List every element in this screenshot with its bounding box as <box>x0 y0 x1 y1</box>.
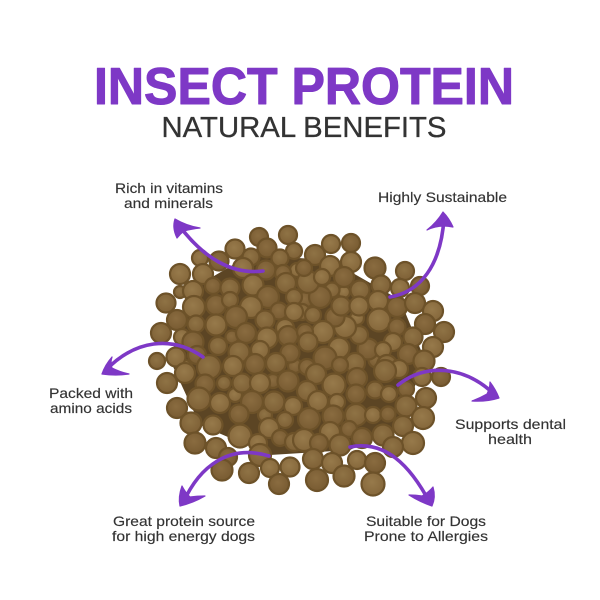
label: dental health: Supports dental <box>455 416 566 432</box>
shadow backing behind kibble pile <box>170 255 425 455</box>
label: vitamins and minerals: and minerals <box>124 195 213 211</box>
arrow: to highly sustainable <box>390 212 453 297</box>
arrow: to vitamins and minerals <box>174 219 263 272</box>
label: allergies: Prone to Allergies <box>364 528 488 544</box>
arrow: to amino acids <box>102 343 203 375</box>
label: high energy dogs: for high energy dogs <box>112 528 255 544</box>
label: amino acids <box>49 385 133 416</box>
arrow: to dental health <box>398 370 499 401</box>
subtitle: NATURAL BENEFITS <box>162 112 447 144</box>
arrow: to high energy dogs <box>179 453 269 506</box>
label: high energy dogs: Great protein source <box>113 513 255 529</box>
title: INSECT PROTEIN <box>94 58 514 116</box>
label: dental health: health <box>488 431 532 447</box>
pile of dog kibble <box>149 226 454 496</box>
label: vitamins and minerals: Rich in vitamins <box>115 180 223 196</box>
label: high energy dogs <box>112 513 255 544</box>
label: allergies <box>364 513 488 544</box>
label: amino acids: amino acids <box>50 400 132 416</box>
label: highly sustainable: Highly Sustainable <box>378 189 507 205</box>
label: vitamins and minerals <box>115 180 223 211</box>
label: allergies: Suitable for Dogs <box>366 513 486 529</box>
arrow: to allergies <box>350 446 434 506</box>
label: dental health <box>455 416 566 447</box>
label: amino acids: Packed with <box>49 385 133 401</box>
